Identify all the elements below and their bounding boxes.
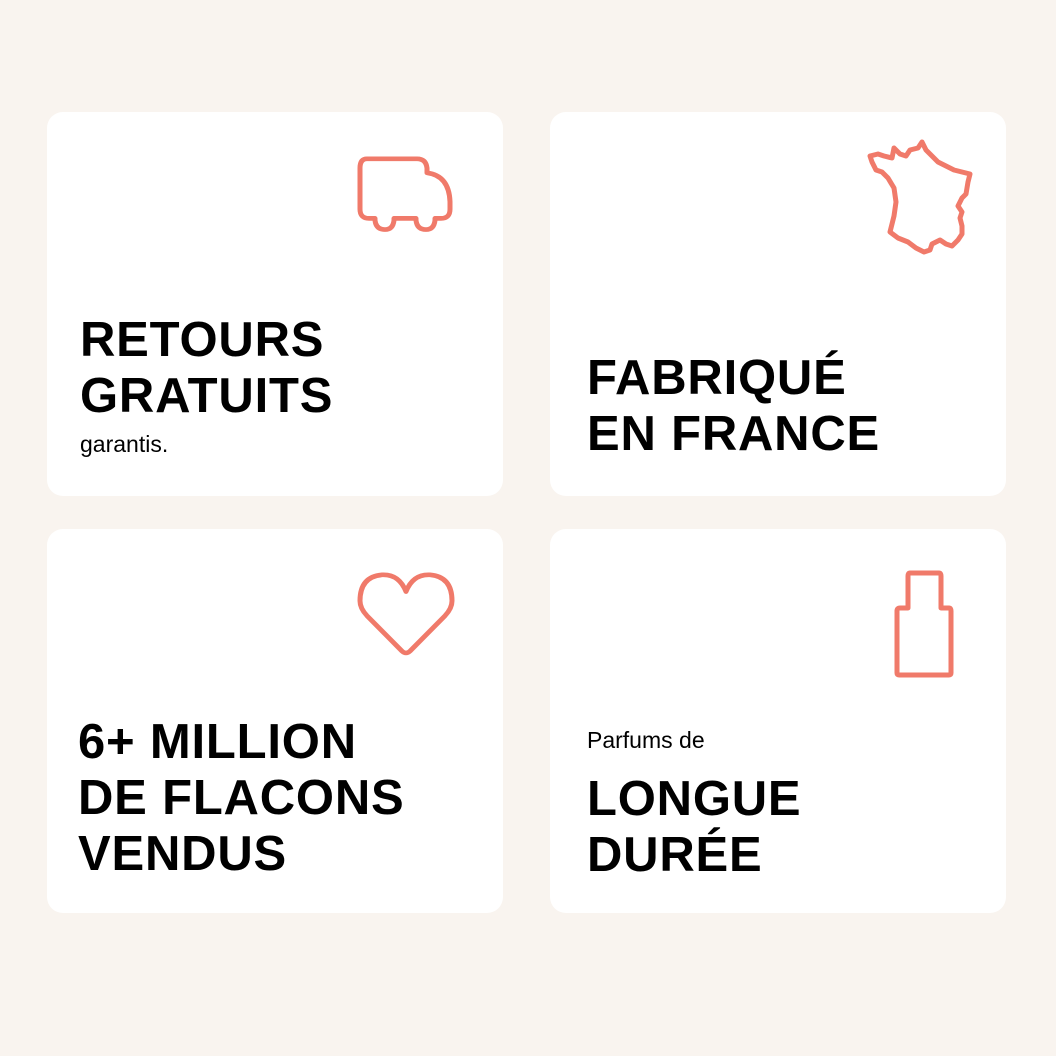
text: parfums de: Parfums de bbox=[587, 727, 705, 753]
heading: longue durée: LONGUE bbox=[587, 772, 801, 826]
heading: fabriqué en france: FABRIQUÉ bbox=[587, 351, 847, 405]
heading: longue durée: DURÉE bbox=[587, 828, 763, 882]
heading: 6+ million de flacons vendus: DE FLACONS bbox=[78, 771, 404, 825]
heading: retours gratuits: RETOURS bbox=[80, 313, 324, 367]
panel: retours gratuits bbox=[47, 112, 503, 496]
heading: fabriqué en france bbox=[587, 350, 880, 461]
heading: retours gratuits bbox=[80, 313, 333, 423]
heading: 6+ million de flacons vendus bbox=[78, 715, 404, 881]
panel: longue durée bbox=[550, 529, 1006, 913]
heading: fabriqué en france: EN FRANCE bbox=[587, 407, 880, 461]
icon: truck bbox=[358, 156, 452, 232]
heading: retours gratuits: GRATUITS bbox=[80, 369, 333, 423]
text: garantis: garantis. bbox=[80, 431, 168, 457]
heading: 6+ million de flacons vendus: VENDUS bbox=[78, 827, 287, 881]
panel: fabriqué en france bbox=[550, 112, 1006, 496]
icon: heart bbox=[358, 572, 454, 656]
heading: longue durée bbox=[587, 772, 801, 882]
heading: 6+ million de flacons vendus: 6+ MILLION bbox=[78, 715, 357, 769]
icon: france map bbox=[868, 140, 972, 254]
icon: perfume bottle bbox=[894, 570, 954, 678]
panel: 6+ million bbox=[47, 529, 503, 913]
